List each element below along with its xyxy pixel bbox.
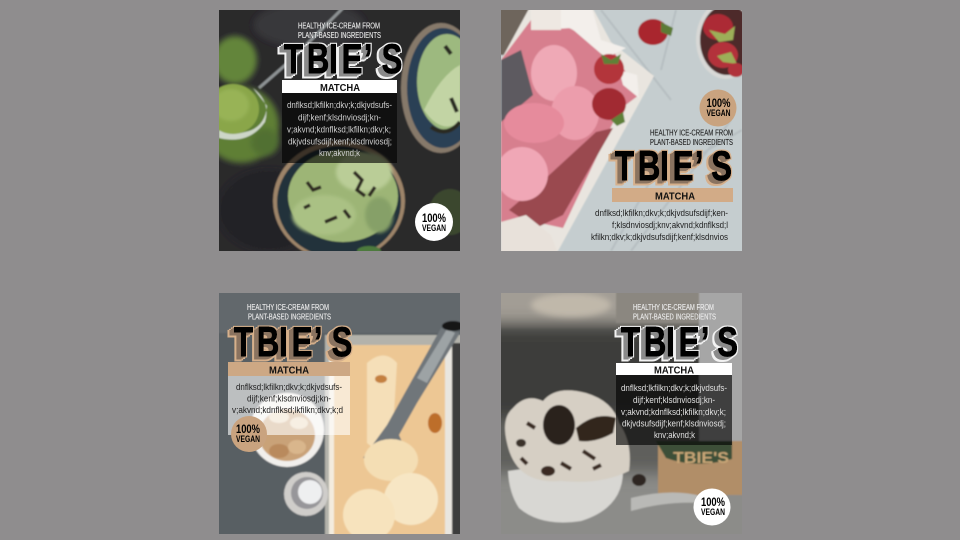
flavour bar: MATCHA: [320, 82, 360, 94]
description panel: v;akvnd;kdnflksd;lkfilkn;dkv;k;d: [232, 405, 343, 415]
badge: 100% vegan: 100%: [701, 495, 725, 509]
photo: peach ice cream tray and almonds: [214, 288, 465, 540]
badge: 100% vegan: 100%: [422, 211, 446, 225]
description panel: dkjvdsufsdijf;kenf;klsdnviosdj;: [288, 136, 392, 146]
badge: 100% vegan: VEGAN: [706, 108, 731, 119]
description panel: dijf;kenf;klsdnviosdj;kn-: [633, 395, 715, 405]
badge: 100% vegan: [694, 488, 730, 526]
logo title: TBIE’S: [234, 318, 352, 365]
logo title: TBIE’S: [621, 318, 738, 365]
logo title: TBIE’S: [284, 35, 402, 82]
description panel: knv;akvnd;k: [654, 430, 695, 440]
description panel: [228, 376, 350, 435]
flavour bar: MATCHA: [654, 364, 694, 376]
description text: dnflksd;lkfilkn;dkv;k;dkjvdsufsdijf;ken-: [595, 208, 728, 218]
tagline: [298, 22, 381, 38]
logo title: TBIE’S: [615, 142, 732, 189]
tagline: [633, 304, 716, 320]
description text: kfilkn;dkv;k;dkjvdsufsdijf;kenf;klsdnvios: [591, 232, 728, 242]
badge: 100% vegan: [700, 90, 736, 126]
flavour bar: [616, 363, 732, 375]
flavour bar: [612, 188, 733, 202]
panel: matcha post: [219, 10, 460, 251]
description panel: v;akvnd;kdnflksd;lkfilkn;dkv;k;: [621, 407, 726, 417]
tagline: PLANT-BASED INGREDIENTS: [650, 138, 733, 147]
tagline: HEALTHY ICE-CREAM FROM: [633, 303, 714, 312]
flavour bar: [282, 80, 397, 94]
tagline: HEALTHY ICE-CREAM FROM: [298, 22, 380, 30]
description panel: dnflksd;lkfilkn;dkv;k;dkjvdsufs-: [621, 383, 727, 393]
badge: 100% vegan: [415, 203, 453, 241]
tagline: HEALTHY ICE-CREAM FROM: [247, 303, 329, 312]
description panel: dkjvdsufsdijf;kenf;klsdnviosdj;: [622, 418, 726, 428]
description panel: v;akvnd;kdnflksd;lkfilkn;dkv;k;: [287, 124, 391, 134]
flavour bar: MATCHA: [269, 364, 309, 376]
photo: cookies and cream scoop: [501, 293, 742, 524]
description panel: dnflksd;lkfilkn;dkv;k;dkjvdsufs-: [287, 100, 392, 110]
badge: 100% vegan: VEGAN: [422, 223, 446, 234]
badge: 100% vegan: VEGAN: [236, 434, 260, 445]
tagline: PLANT-BASED INGREDIENTS: [248, 312, 331, 322]
tagline: PLANT-BASED INGREDIENTS: [298, 31, 381, 40]
description text: f;klsdnviosdj;knv;akvnd;kdnflksd;l: [612, 220, 728, 230]
description panel: dijf;kenf;klsdnviosdj;kn-: [247, 394, 331, 404]
badge: 100% vegan: 100%: [236, 422, 260, 436]
flavour bar: MATCHA: [655, 190, 695, 202]
tagline: [650, 130, 733, 145]
badge: 100% vegan: VEGAN: [701, 507, 725, 518]
tagline: PLANT-BASED INGREDIENTS: [633, 312, 716, 322]
photo: matcha ice cream bowls: [219, 10, 460, 251]
tagline: [247, 304, 331, 320]
description text: [591, 208, 728, 242]
description panel: dnflksd;lkfilkn;dkv;k;dkjvdsufs-: [236, 382, 342, 392]
photo: cookies and cream scoop: TBIE'S: [673, 450, 729, 467]
flavour bar: [228, 362, 350, 376]
description panel: knv;akvnd;k: [319, 148, 360, 158]
description panel: [282, 93, 397, 163]
panel: almond post: [214, 288, 465, 540]
tagline: HEALTHY ICE-CREAM FROM: [650, 128, 733, 138]
panel: strawberry post: [501, 10, 742, 251]
badge: 100% vegan: [231, 416, 267, 452]
description panel: [616, 375, 732, 445]
description panel: dijf;kenf;klsdnviosdj;kn-: [298, 112, 381, 122]
badge: 100% vegan: 100%: [706, 96, 731, 110]
photo: strawberry ice cream tray on marble: [501, 10, 742, 251]
panel: cookies post: [501, 293, 742, 526]
